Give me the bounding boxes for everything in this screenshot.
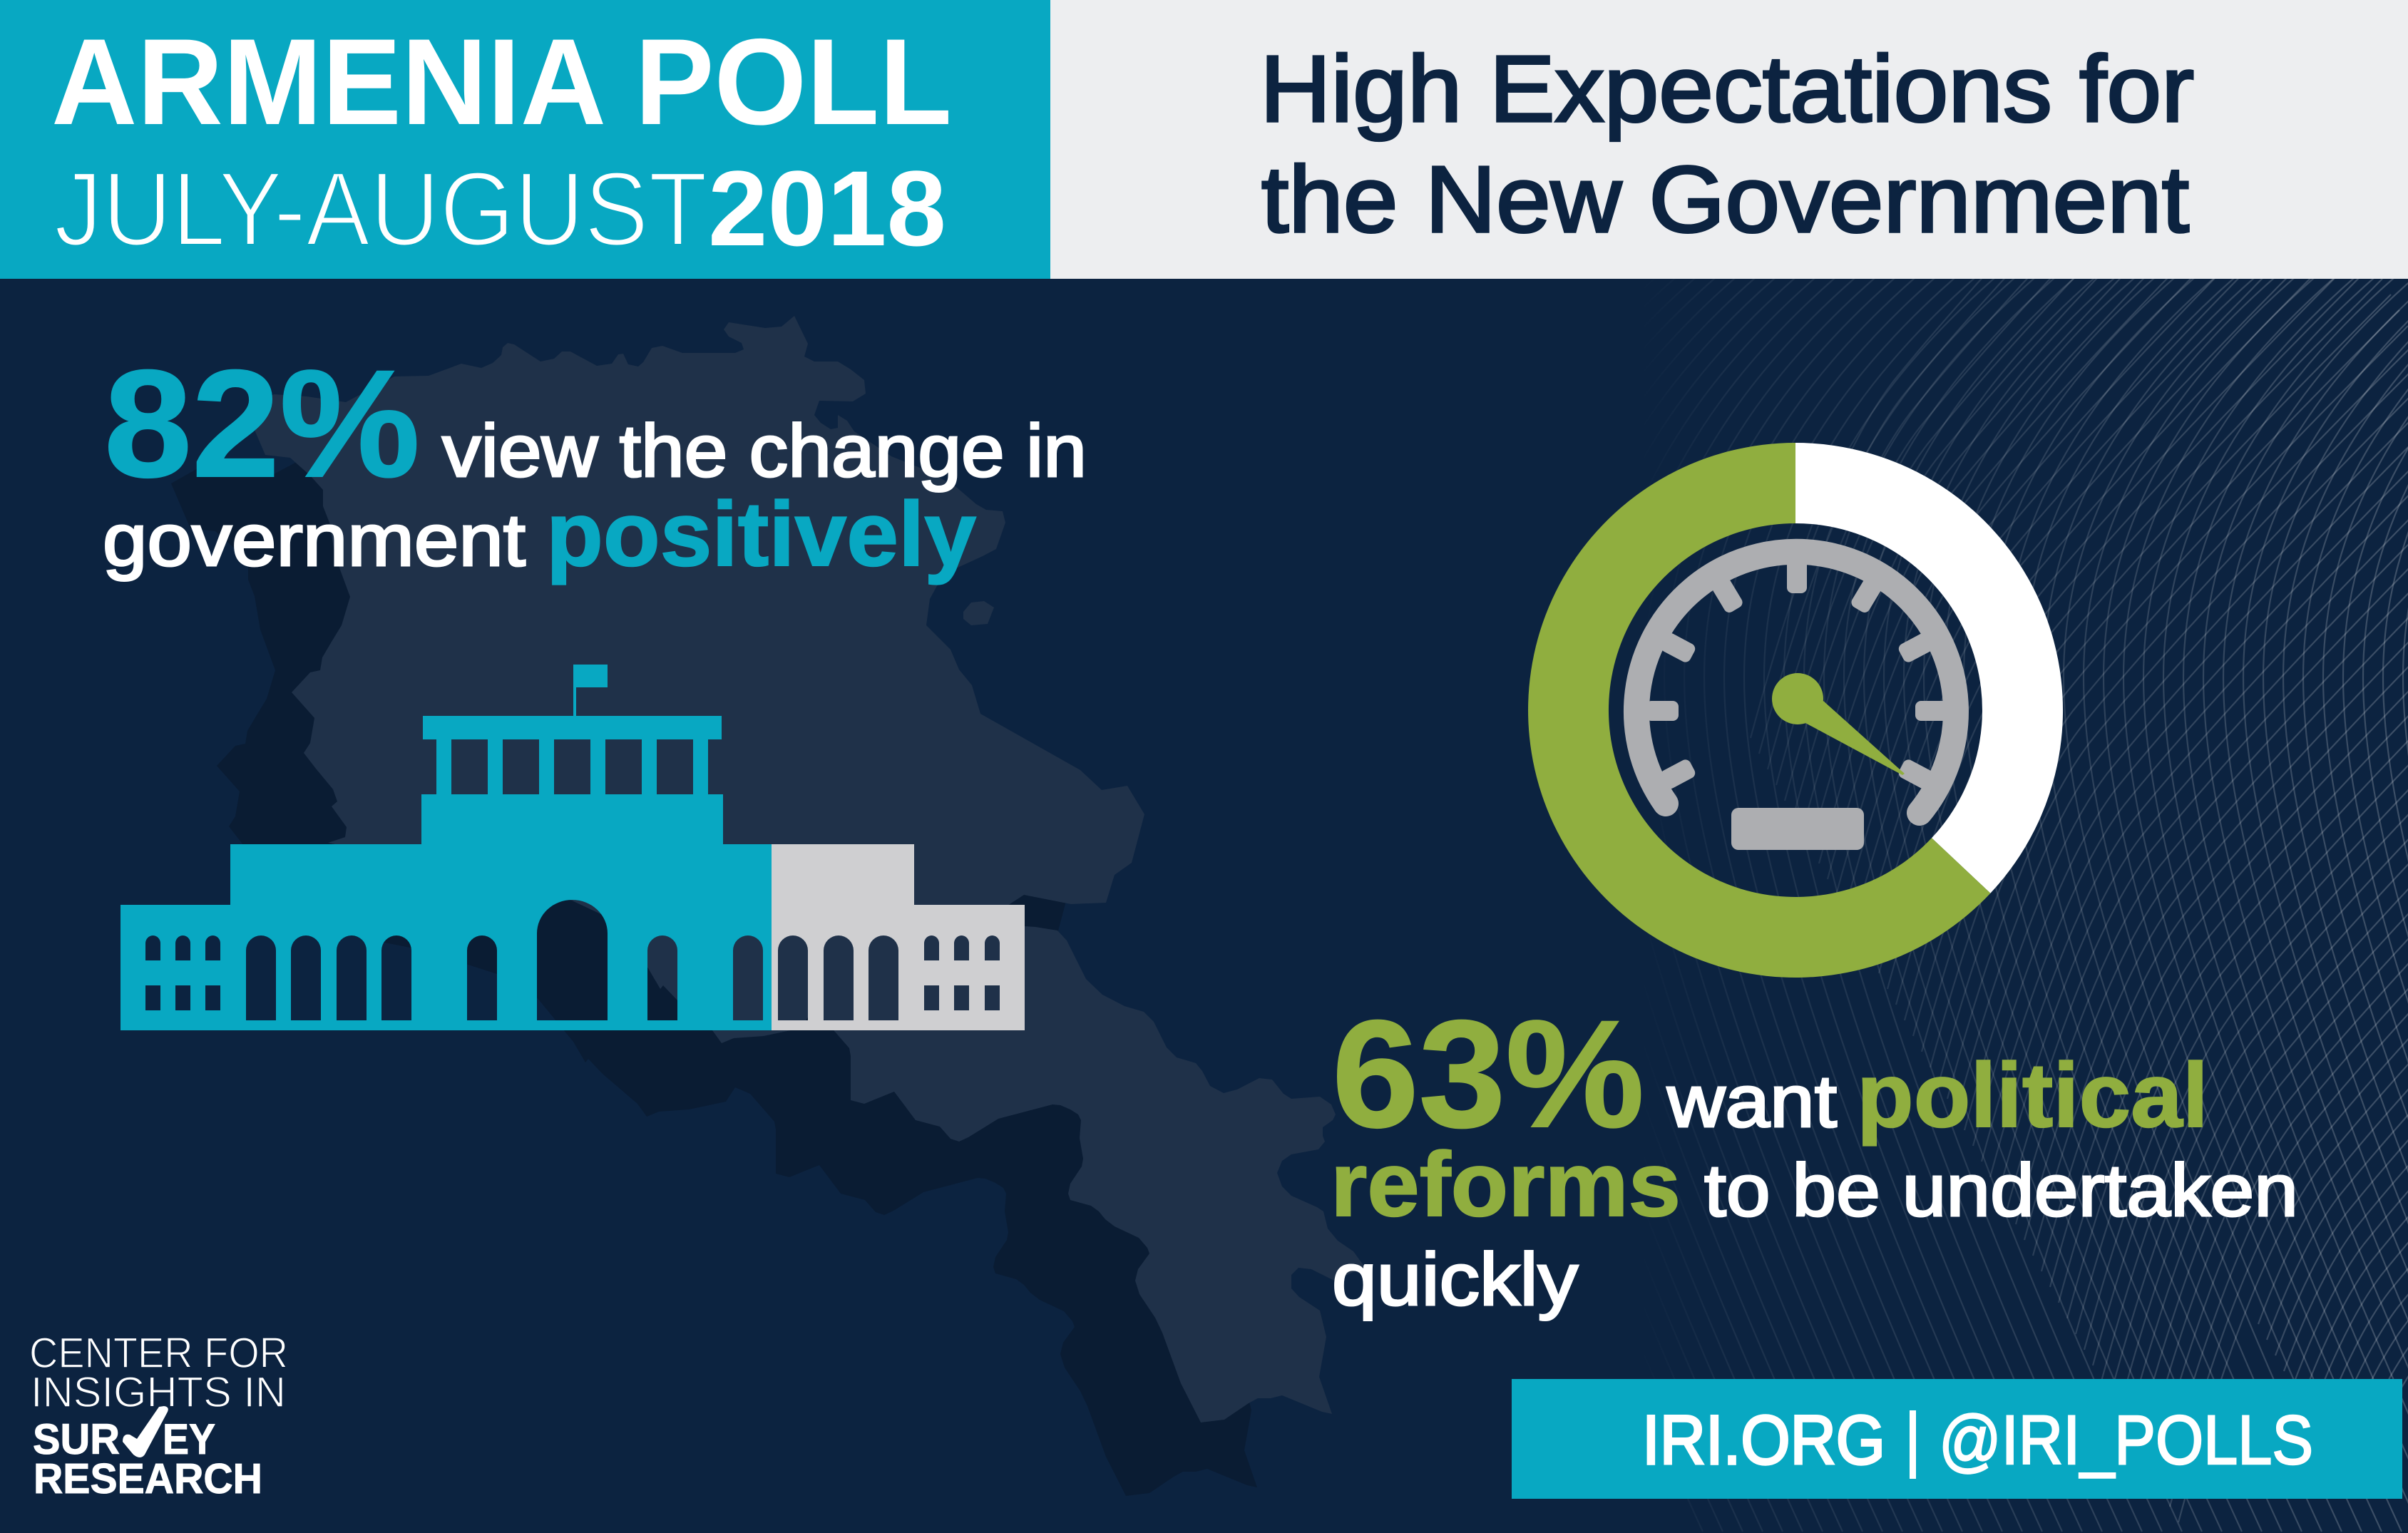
header panel: headline [1050,0,2408,279]
headline line 1: High Expectations for [1260,36,2194,141]
icon: government building, 82% shaded [121,665,1025,1030]
map shadow: Armenia [171,389,1290,1496]
stat text: 63% political reforms: to be undertaken [1704,1149,2298,1232]
subtitle: July-August: JULY-AUGUST [54,150,707,268]
stat text: 82% positive: view the change in [442,410,1087,493]
stat text: 63% political reforms: political [1857,1045,2208,1147]
footer band: links [1512,1379,2402,1499]
footer band: links: IRI.ORG [1642,1401,1885,1479]
footer band: links: @IRI_POLLS [1939,1401,2313,1479]
logo: Center for Insights in Survey Research [29,1329,288,1502]
stat text: 82% positive: government [103,499,526,582]
logo: Center for Insights in Survey Research: EY [163,1415,215,1463]
stat text: 82% positive [103,339,1087,585]
building: grey portion [772,844,1025,1030]
stat text: 63% political reforms [1331,989,2298,1321]
building: teal portion [121,665,772,1030]
map: Armenia [246,316,1365,1422]
icon: check mark [123,1406,168,1457]
stat text: 63% political reforms: want [1666,1060,1837,1143]
stat text: 82% positive: positively [546,483,976,585]
stat text: 63% political reforms: reforms [1331,1134,1681,1236]
logo: Center for Insights in Survey Research: RESEARCH [34,1455,262,1502]
stat text: 82% positive: 82% [104,339,420,509]
header panel: poll title [0,0,1050,279]
title: Armenia Poll: ARMENIA POLL [51,14,952,150]
stat text: 63% political reforms: 63% [1332,989,1644,1159]
logo: Center for Insights in Survey Research: SUR [33,1415,120,1463]
subtitle: year: 2018 [708,148,946,268]
headline line 2: the New Government [1261,147,2189,252]
stat text: 63% political reforms: quickly [1332,1239,1578,1321]
logo: Center for Insights in Survey Research: CENTER FOR [29,1329,288,1377]
icon: speedometer [1636,552,1956,850]
logo: Center for Insights in Survey Research: INSIGHTS IN [31,1368,286,1416]
donut chart: 63% [1528,443,2063,978]
